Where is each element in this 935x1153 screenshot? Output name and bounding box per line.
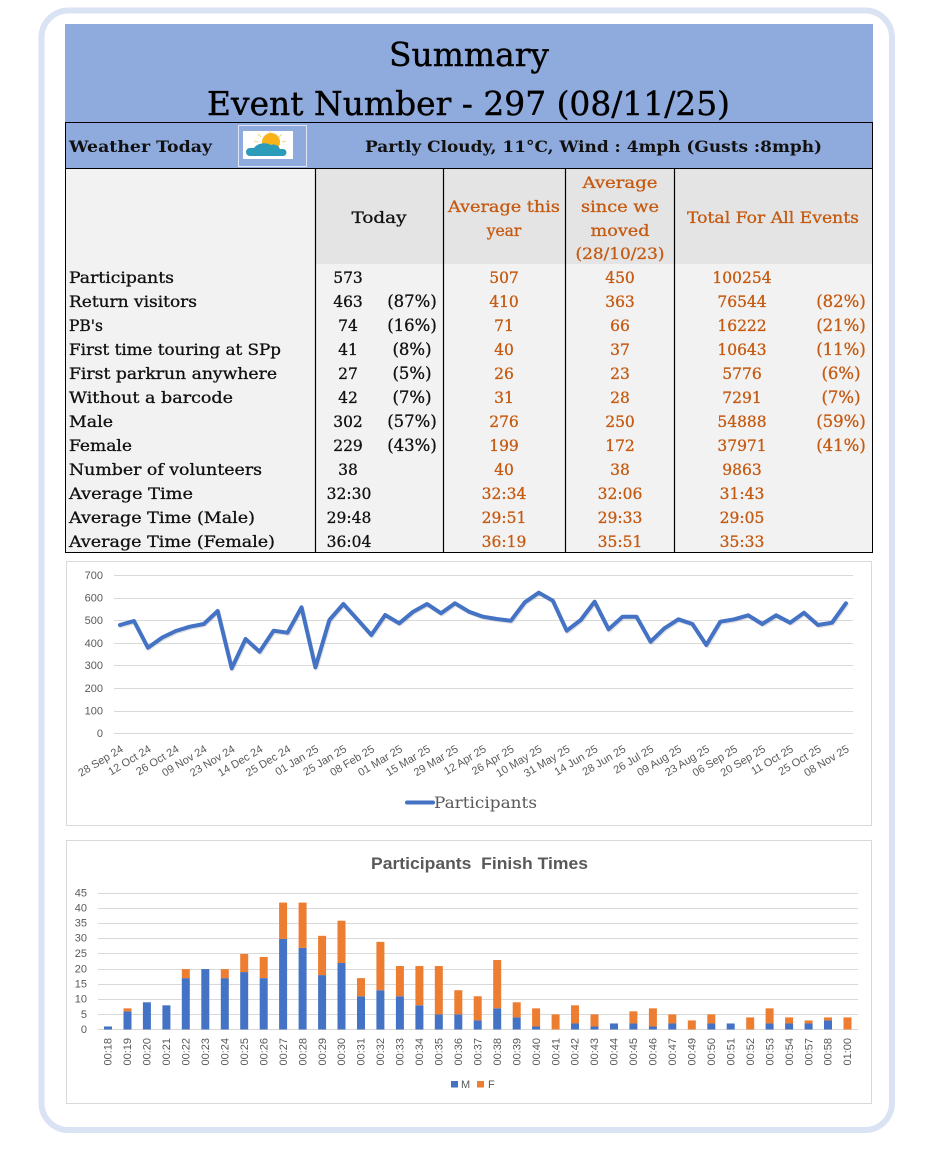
row labels: Male xyxy=(69,413,113,431)
x axis date labels: 01 Jan 25 xyxy=(273,743,321,778)
y axis labels: 20 xyxy=(75,964,87,976)
x axis date labels: 14 Jun 25 xyxy=(553,743,600,778)
today values: 32:30 xyxy=(327,485,371,503)
total values xyxy=(712,269,772,551)
total values: 76544 xyxy=(717,293,767,311)
title: event number: Event Number - 297 (08/11/25) xyxy=(207,84,730,123)
total values: 7291 xyxy=(722,389,762,407)
x axis time labels: 00:23 xyxy=(200,1038,212,1066)
total values: 9863 xyxy=(722,461,762,479)
x axis time labels: 00:29 xyxy=(317,1038,329,1066)
average since moved values: 66 xyxy=(610,317,630,335)
x axis date labels: 01 Mar 25 xyxy=(356,743,405,779)
row labels: PB's xyxy=(69,317,103,335)
x axis date labels: 08 Nov 25 xyxy=(802,743,851,779)
average this year values: 26 xyxy=(494,365,514,383)
x axis time labels: 00:37 xyxy=(472,1038,484,1066)
average this year values: 410 xyxy=(489,293,519,311)
row labels: Average Time (Male) xyxy=(68,509,255,527)
x axis date labels: 26 Apr 25 xyxy=(470,743,516,778)
y axis labels: 25 xyxy=(75,948,87,960)
x axis time labels: 00:45 xyxy=(628,1038,640,1066)
x axis date labels: 31 May 25 xyxy=(522,743,572,780)
panel: statistics table xyxy=(66,168,872,553)
average since moved values: 172 xyxy=(605,437,635,455)
row labels: Average Time xyxy=(68,485,193,503)
bar chart legend xyxy=(451,1079,495,1091)
x axis time labels: 00:34 xyxy=(414,1038,426,1066)
panel: participants line chart xyxy=(66,562,872,826)
today percentages: (8%) xyxy=(392,340,432,359)
today percentages xyxy=(387,292,437,455)
total values: 35:33 xyxy=(720,533,764,551)
x axis date labels: 12 Apr 25 xyxy=(442,743,489,778)
column header: total for all events: Total For All Events xyxy=(687,209,859,227)
column header: average since moved: since we xyxy=(581,198,659,216)
x axis time labels: 00:35 xyxy=(434,1038,446,1066)
x axis time labels: 00:54 xyxy=(784,1038,796,1066)
average this year values: 199 xyxy=(489,437,519,455)
y axis labels: 40 xyxy=(75,902,87,914)
row labels: First time touring at SPp xyxy=(69,341,281,359)
x axis date labels xyxy=(76,743,851,780)
average since moved values: 29:33 xyxy=(598,509,642,527)
x axis time labels: 00:49 xyxy=(686,1038,698,1066)
today values: 36:04 xyxy=(327,533,371,551)
column header: average this year: Average this xyxy=(447,198,560,216)
weather row xyxy=(66,122,872,168)
today percentages: (87%) xyxy=(387,292,437,311)
y axis labels: 400 xyxy=(85,638,103,650)
y axis labels: 200 xyxy=(85,683,103,695)
total percentages: (82%) xyxy=(816,292,866,311)
weather description: Partly Cloudy, 11°C, Wind : 4mph (Gusts :8mph) xyxy=(365,137,822,156)
x axis time labels: 00:41 xyxy=(550,1038,562,1066)
icon: sun and cloud xyxy=(238,126,306,166)
average since moved values: 363 xyxy=(605,293,635,311)
today values: 29:48 xyxy=(327,509,371,527)
column header: average since moved: (28/10/23) xyxy=(576,245,664,263)
total percentages: (21%) xyxy=(816,316,866,335)
average this year values: 71 xyxy=(494,317,514,335)
x axis time labels: 00:36 xyxy=(453,1038,465,1066)
today percentages: (5%) xyxy=(392,364,432,383)
average this year values: 276 xyxy=(489,413,519,431)
row labels: Without a barcode xyxy=(69,389,233,407)
today values: 74 xyxy=(338,317,358,335)
total values: 5776 xyxy=(722,365,762,383)
x axis date labels: 28 Jun 25 xyxy=(581,743,628,778)
y axis labels: 600 xyxy=(85,592,103,604)
x axis date labels: 25 Jan 25 xyxy=(301,743,349,778)
y axis labels: 45 xyxy=(75,888,87,900)
x axis date labels: 09 Nov 24 xyxy=(160,743,209,779)
row labels: Female xyxy=(69,437,132,455)
x axis time labels: 00:26 xyxy=(258,1038,270,1066)
x axis time labels: 00:31 xyxy=(356,1038,368,1066)
x axis time labels: 00:22 xyxy=(180,1038,192,1066)
x axis time labels: 00:28 xyxy=(297,1038,309,1066)
row labels: Number of volunteers xyxy=(69,461,262,479)
today values xyxy=(327,269,371,551)
total percentages: (41%) xyxy=(816,436,866,455)
total values: 100254 xyxy=(712,269,772,287)
x axis time labels: 00:51 xyxy=(725,1038,737,1066)
male bars xyxy=(104,939,832,1030)
total percentages: (6%) xyxy=(821,364,861,383)
today percentages: (16%) xyxy=(387,316,437,335)
panel: finish times bar chart xyxy=(66,840,872,1104)
x axis time labels: 00:21 xyxy=(161,1038,173,1066)
total values: 16222 xyxy=(717,317,767,335)
x axis date labels: 11 Oct 25 xyxy=(749,743,796,778)
x axis date labels: 08 Feb 25 xyxy=(328,743,377,779)
x axis time labels: 00:30 xyxy=(336,1038,348,1066)
y axis labels: 30 xyxy=(75,932,87,944)
x axis time labels: 00:38 xyxy=(492,1038,504,1066)
x axis time labels: 00:40 xyxy=(531,1038,543,1066)
x axis date labels: 23 Nov 24 xyxy=(188,743,237,779)
x axis time labels: 00:43 xyxy=(589,1038,601,1066)
today percentages: (57%) xyxy=(387,412,437,431)
average since moved values: 35:51 xyxy=(598,533,642,551)
total percentages: (7%) xyxy=(821,388,861,407)
weather heading: Weather Today xyxy=(68,137,213,156)
total percentages: (11%) xyxy=(816,340,866,359)
x axis date labels: 09 Aug 25 xyxy=(635,743,684,779)
x axis date labels: 06 Sep 25 xyxy=(691,743,740,779)
x axis time labels: 00:32 xyxy=(375,1038,387,1066)
average since moved values xyxy=(598,269,642,551)
today values: 27 xyxy=(338,365,358,383)
y axis labels: 100 xyxy=(85,706,103,718)
row labels: First parkrun anywhere xyxy=(69,365,277,383)
average since moved values: 23 xyxy=(610,365,630,383)
average since moved values: 37 xyxy=(610,341,630,359)
x axis date labels: 15 Mar 25 xyxy=(384,743,433,779)
average since moved values: 450 xyxy=(605,269,635,287)
today percentages: (7%) xyxy=(392,388,432,407)
total values: 29:05 xyxy=(720,509,764,527)
today values: 41 xyxy=(338,341,358,359)
x axis date labels: 25 Dec 24 xyxy=(244,743,293,779)
total values: 31:43 xyxy=(720,485,764,503)
average this year values: 40 xyxy=(494,461,514,479)
x axis date labels: 29 Mar 25 xyxy=(412,743,461,779)
x axis time labels: 00:47 xyxy=(667,1038,679,1066)
x axis time labels: 00:33 xyxy=(395,1038,407,1066)
column header: average this year xyxy=(447,198,560,240)
today values: 38 xyxy=(338,461,358,479)
average this year values: 40 xyxy=(494,341,514,359)
x axis time labels xyxy=(103,1038,854,1066)
y axis labels: 300 xyxy=(85,660,103,672)
today values: 573 xyxy=(333,269,363,287)
today values: 42 xyxy=(338,389,358,407)
x axis time labels: 00:57 xyxy=(803,1038,815,1066)
row labels: Participants xyxy=(69,269,174,287)
total percentages: (59%) xyxy=(816,412,866,431)
average this year values: 31 xyxy=(494,389,514,407)
column header: today: Today xyxy=(352,209,407,227)
y axis labels: 500 xyxy=(85,615,103,627)
x axis date labels: 28 Sep 24 xyxy=(76,743,126,779)
column header: average this year: year xyxy=(486,222,522,240)
chart title: Participants Finish Times xyxy=(371,854,588,873)
line chart legend: Participants xyxy=(434,793,537,812)
x axis time labels: 01:00 xyxy=(842,1038,854,1066)
y axis labels: 700 xyxy=(85,570,103,582)
x axis date labels: 23 Aug 25 xyxy=(663,743,712,779)
total values: 10643 xyxy=(717,341,767,359)
today values: 302 xyxy=(333,413,363,431)
x axis time labels: 00:58 xyxy=(823,1038,835,1066)
x axis time labels: 00:24 xyxy=(220,1038,232,1066)
x axis time labels: 00:19 xyxy=(122,1038,134,1066)
y axis labels xyxy=(85,570,103,740)
average since moved values: 28 xyxy=(610,389,630,407)
title: Summary: Summary xyxy=(389,35,549,74)
total values: 37971 xyxy=(717,437,767,455)
average this year values: 29:51 xyxy=(482,509,526,527)
average this year values: 36:19 xyxy=(482,533,526,551)
x axis time labels: 00:20 xyxy=(142,1038,154,1066)
average since moved values: 250 xyxy=(605,413,635,431)
x axis date labels: 12 Oct 24 xyxy=(106,743,153,778)
y axis labels: 35 xyxy=(75,918,87,930)
average this year values xyxy=(482,269,526,551)
x axis time labels: 00:44 xyxy=(609,1038,621,1066)
x axis time labels: 00:27 xyxy=(278,1038,290,1066)
row labels: Return visitors xyxy=(69,293,197,311)
column header: average since moved: moved xyxy=(590,222,650,240)
title banner xyxy=(65,24,873,123)
bar chart legend: M xyxy=(461,1079,470,1091)
row labels: Average Time (Female) xyxy=(68,533,275,551)
average since moved values: 32:06 xyxy=(598,485,642,503)
row labels xyxy=(68,269,281,551)
x axis time labels: 00:52 xyxy=(745,1038,757,1066)
today percentages: (43%) xyxy=(387,436,437,455)
y axis labels: 15 xyxy=(75,978,87,990)
column header: average since moved xyxy=(576,174,664,263)
column header: average since moved: Average xyxy=(581,174,658,192)
x axis time labels: 00:25 xyxy=(239,1038,251,1066)
x axis time labels: 00:42 xyxy=(570,1038,582,1066)
x axis time labels: 00:18 xyxy=(103,1038,115,1066)
bar chart legend: F xyxy=(488,1079,495,1091)
total percentages xyxy=(816,292,866,455)
x axis time labels: 00:50 xyxy=(706,1038,718,1066)
x axis time labels: 00:39 xyxy=(511,1038,523,1066)
x axis date labels: 14 Dec 24 xyxy=(216,743,265,779)
y axis labels: 5 xyxy=(81,1009,87,1021)
x axis date labels: 26 Oct 24 xyxy=(134,743,181,778)
today values: 229 xyxy=(333,437,363,455)
x axis date labels: 20 Sep 25 xyxy=(719,743,768,779)
y axis labels: 0 xyxy=(97,728,103,740)
average this year values: 32:34 xyxy=(482,485,526,503)
y axis labels: 10 xyxy=(75,994,87,1006)
x axis time labels: 00:46 xyxy=(648,1038,660,1066)
y axis labels: 0 xyxy=(81,1024,87,1036)
x axis date labels: 26 Jul 25 xyxy=(612,743,656,777)
x axis date labels: 10 May 25 xyxy=(494,743,544,780)
average since moved values: 38 xyxy=(610,461,630,479)
x axis date labels: 25 Oct 25 xyxy=(776,743,824,778)
total values: 54888 xyxy=(717,413,767,431)
y axis labels xyxy=(75,888,87,1036)
participants line xyxy=(120,593,847,670)
today values: 463 xyxy=(333,293,363,311)
average this year values: 507 xyxy=(489,269,519,287)
female bars xyxy=(124,903,852,1030)
x axis time labels: 00:53 xyxy=(764,1038,776,1066)
